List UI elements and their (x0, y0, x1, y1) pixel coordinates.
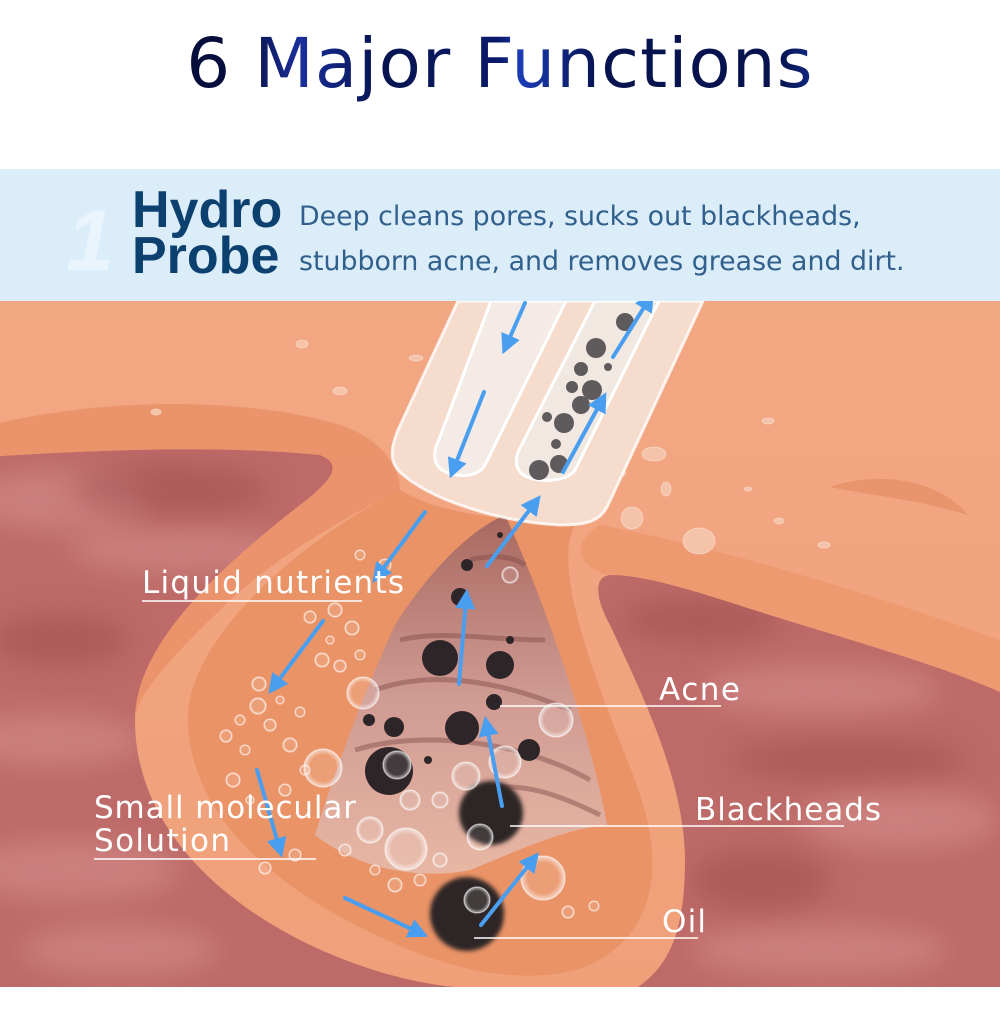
description text (299, 201, 904, 277)
label: Liquid nutrients: Liquid nutrients (142, 565, 404, 601)
hydro probe tip (392, 301, 703, 525)
label: Acne: Acne (659, 672, 740, 708)
label: Small molecular Solution (94, 790, 356, 859)
panel: hydro probe header band (0, 169, 1000, 301)
label: Small molecular Solution: Solution (94, 823, 230, 859)
label: Blackheads: Blackheads (695, 792, 881, 828)
debris in suction channel (529, 313, 634, 480)
number watermark: 1 (66, 193, 114, 289)
acne and blackhead particles (363, 532, 540, 951)
water droplets on skin (151, 340, 830, 554)
heading: Hydro Probe: Probe (132, 227, 279, 285)
blue flow arrows (257, 301, 648, 932)
deep tissue background (0, 301, 1000, 987)
skin shading (0, 404, 1000, 720)
title (0, 16, 1000, 116)
label: Oil: Oil (662, 904, 706, 940)
upper skin and pore wall (0, 301, 1000, 987)
label: Small molecular Solution: Small molecular (94, 790, 356, 826)
probe suction channel (516, 301, 659, 480)
illustration: pore cross-section (0, 301, 1000, 987)
description text: Deep cleans pores, sucks out blackheads, (299, 201, 861, 232)
probe inlet channel (435, 301, 566, 475)
title: 6 Major Functions (186, 24, 814, 104)
pore interior (188, 490, 652, 976)
heading: Hydro Probe (132, 181, 282, 285)
clogged sebum plug (315, 515, 607, 874)
bubbles of liquid nutrients (220, 550, 599, 918)
heading: Hydro Probe: Hydro (132, 181, 282, 239)
description text: stubborn acne, and removes grease and dirt. (299, 246, 904, 277)
